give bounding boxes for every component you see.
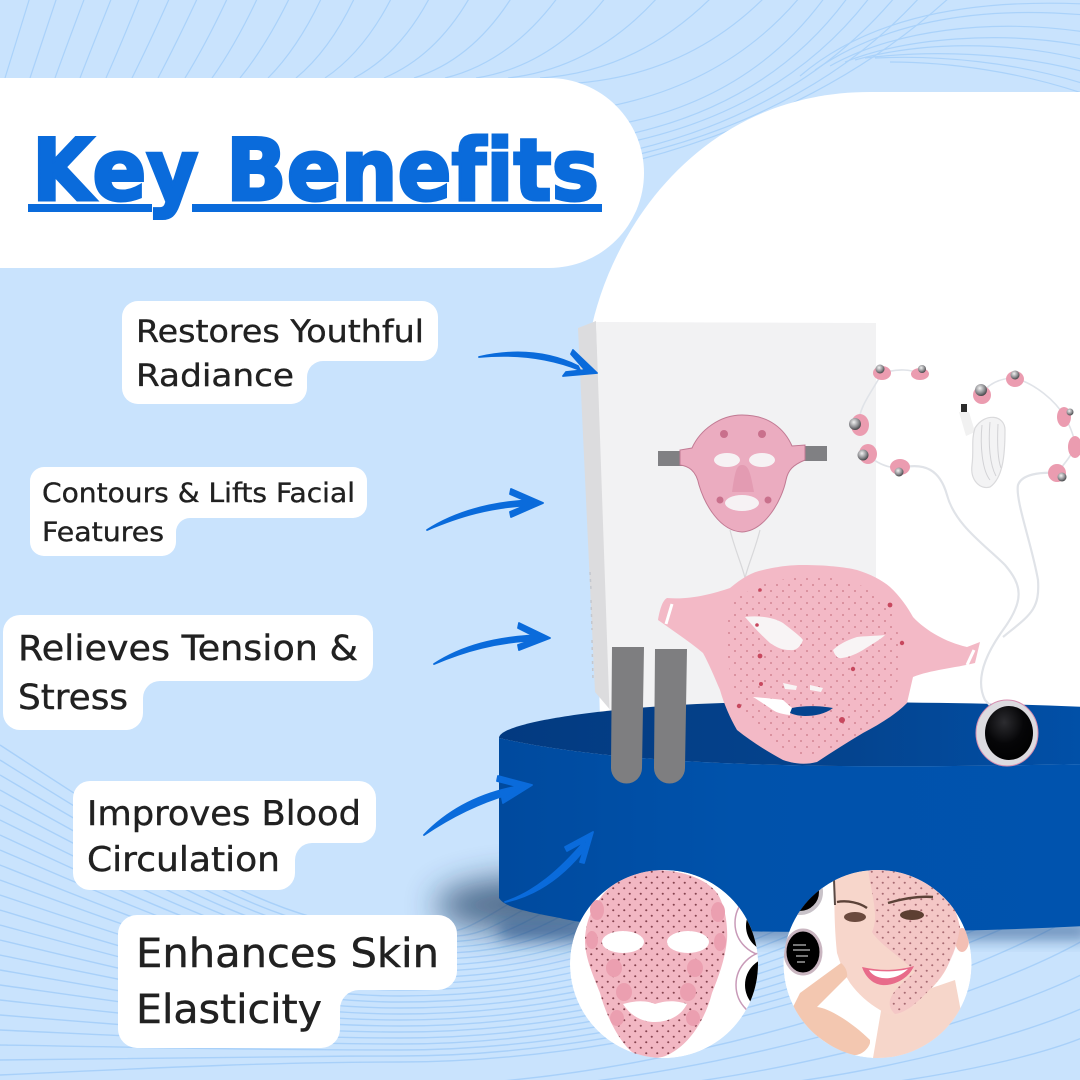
hand — [793, 963, 870, 1055]
electrode beads — [849, 364, 1080, 482]
product box — [578, 321, 876, 725]
hair line — [834, 880, 835, 905]
brows, eyes — [837, 897, 933, 908]
label: Enhances Skin Elasticity: Elasticity — [136, 987, 322, 1033]
ear — [955, 928, 969, 952]
label: Enhances Skin Elasticity — [118, 915, 457, 1048]
power cords — [858, 370, 1075, 716]
mask mouth opening — [753, 697, 792, 715]
electrode bumps — [586, 900, 726, 1026]
label: Relieves Tension & Stress: Relieves Tension & — [18, 629, 358, 669]
dots — [585, 870, 727, 1058]
blue podium — [499, 702, 1080, 932]
USB cable — [959, 404, 1005, 488]
label: Contours & Lifts Facial Features — [30, 467, 367, 556]
circle photo: woman wearing mask — [779, 868, 972, 1058]
decorative white backdrop blob — [590, 92, 1080, 720]
arrow 3 — [434, 623, 550, 664]
title text: Key Benefits — [32, 121, 599, 221]
arrow 1 — [479, 350, 597, 376]
mask eye openings — [745, 616, 803, 650]
strap slots — [666, 604, 974, 665]
eye holes and mouth — [602, 931, 709, 1022]
mini mask picture on box — [658, 415, 827, 578]
control unit — [976, 700, 1038, 766]
control units in photo — [784, 888, 823, 976]
title banner — [0, 78, 644, 268]
label: Contours & Lifts Facial Features: Features — [42, 517, 164, 548]
arrow 5 — [505, 832, 593, 902]
decorative shadow under podium — [435, 877, 1080, 938]
arrow 2 — [427, 489, 543, 530]
arrow 4 — [424, 776, 532, 835]
side control units — [734, 906, 758, 1010]
mask overlay — [868, 868, 960, 1014]
label: Restores Youthful Radiance: Radiance — [136, 358, 294, 394]
label: Relieves Tension & Stress — [3, 615, 373, 730]
grey velcro straps — [611, 647, 687, 784]
circle photo: mask with electrodes — [570, 870, 758, 1058]
label: Improves Blood Circulation — [73, 781, 376, 890]
face — [834, 868, 960, 1015]
label: Improves Blood Circulation: Circulation — [87, 840, 280, 880]
mask red dots — [737, 588, 904, 723]
smile — [862, 966, 914, 985]
label: Enhances Skin Elasticity: Enhances Skin — [136, 931, 439, 977]
neck — [873, 980, 962, 1058]
label: Improves Blood Circulation: Improves Blood — [87, 794, 361, 834]
label: Restores Youthful Radiance: Restores Youthful — [136, 314, 424, 350]
mask perforations — [726, 577, 900, 755]
label: Contours & Lifts Facial Features: Contours & Lifts Facial — [42, 478, 355, 509]
label: Relieves Tension & Stress: Stress — [18, 678, 128, 718]
label: Restores Youthful Radiance — [122, 301, 438, 404]
mask nose openings — [783, 683, 823, 692]
podium top surface — [499, 702, 1080, 766]
large pink mask — [658, 565, 980, 764]
title underline — [28, 204, 602, 212]
